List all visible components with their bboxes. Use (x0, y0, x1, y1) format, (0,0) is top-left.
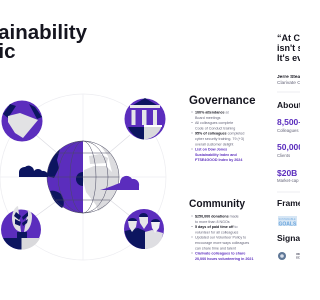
logo: signatory badge (278, 252, 300, 260)
bullet list: governance: 95% of colleagues completed (195, 132, 244, 136)
bullet list: community: can share time and talent (195, 246, 236, 250)
quote (277, 33, 320, 63)
logo: sustainable development goals (278, 216, 297, 228)
bullet list: community: 5 days of paid time off to (195, 225, 238, 229)
icon: people community (124, 209, 164, 249)
icon: globe (47, 141, 119, 213)
bullet list: governance: FTSE4GOOD Index by 2024 (195, 158, 242, 162)
heading: governance: Governance (189, 95, 255, 107)
icon: purple cloud (100, 176, 139, 190)
logo: signatory badge: GC (296, 256, 300, 260)
logo: sustainable development goals: GOALS (278, 222, 297, 228)
icon: plant in hand (1, 206, 41, 250)
bullet list: community: Clarivate colleagues to share (195, 252, 245, 256)
stat: market cap: $20B (277, 168, 297, 178)
logo: signatory badge: UN (296, 253, 300, 256)
diagram frame: ring and spokes (0, 94, 166, 260)
panel: governance (189, 95, 255, 162)
bullet list: governance: overall customer delight (195, 142, 233, 146)
title (0, 21, 88, 63)
bullet list: governance: cyber security training. 79 (+3) (195, 137, 244, 141)
icon: institution building (124, 98, 166, 140)
bullet list: community: volunteer for all colleagues (195, 230, 238, 234)
bullet list: governance: Code of Conduct training (195, 126, 235, 130)
bullet list: governance: 100% attendance at (195, 110, 229, 114)
bullet list: governance: List on Dow Jones (195, 148, 227, 152)
logo: sustainable development goals: SUSTAINABLE (278, 218, 296, 221)
stat: colleagues (277, 117, 303, 133)
heading: community: Community (189, 198, 246, 210)
bullet list: governance (192, 110, 244, 162)
bullet list: community: 20,000 hours volunteering in 2021 (195, 257, 253, 261)
panel: community (189, 198, 253, 261)
bullet list: governance: Board meetings (195, 116, 221, 120)
bullet list: community: to more than 8 NGOs (195, 220, 230, 224)
bullet list: governance: All colleagues complete (195, 121, 233, 125)
quote attribution (277, 74, 308, 86)
icon: handshake (2, 100, 42, 142)
bullet list: community: Updated our Volunteer Policy to (195, 236, 246, 240)
icon: dark cloud (19, 166, 48, 177)
stat: market cap: Market-cap (277, 178, 299, 183)
stat: clients (277, 142, 308, 158)
stat: market cap (277, 168, 299, 183)
bullet list: community: $250,000 donations made (195, 214, 239, 218)
bullet list: community: encourage more ways colleagues (195, 241, 249, 245)
bullet list: governance: Sustainability Index and (195, 153, 237, 157)
stat: colleagues: Colleagues (277, 128, 298, 133)
bullet list: community (192, 214, 253, 261)
stat: clients: Clients (277, 153, 290, 158)
